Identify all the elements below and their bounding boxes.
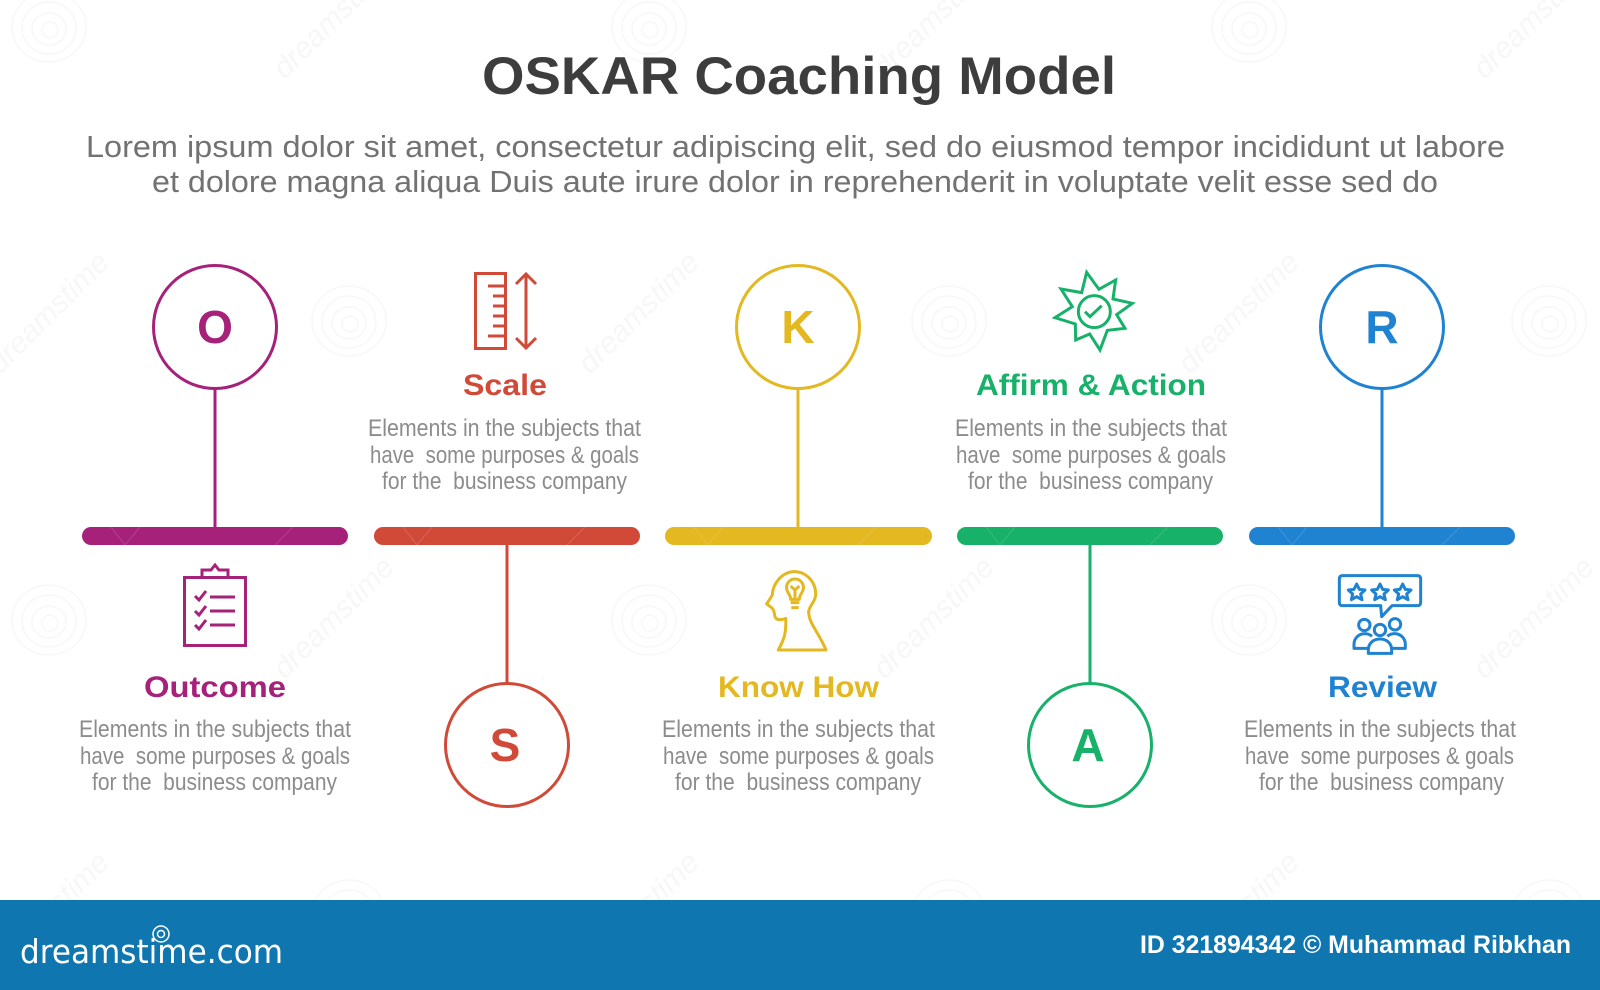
panel: Know How xyxy=(662,266,935,796)
description: Scale xyxy=(368,415,641,495)
heading: Scale: Scale xyxy=(463,369,547,402)
description: Review xyxy=(1244,716,1516,796)
letter circle: K: K xyxy=(781,301,815,353)
watermark: dreamstime xyxy=(1467,551,1600,685)
description: Review: have some purposes & goals xyxy=(1245,743,1514,770)
watermark: dreamstime xyxy=(867,551,1001,685)
watermark: dreamstime xyxy=(267,551,401,685)
description: Know How: Elements in the subjects that xyxy=(662,716,935,743)
description: Scale: Elements in the subjects that xyxy=(368,415,641,442)
description: Affirm & Action xyxy=(955,415,1227,495)
description: Scale: for the business company xyxy=(382,468,627,495)
icon: ruler with arrow xyxy=(476,274,536,348)
footer bar xyxy=(0,900,1600,990)
description: Know How: have some purposes & goals xyxy=(663,743,934,770)
description: Review: for the business company xyxy=(1259,769,1504,796)
letter circle: R xyxy=(1320,266,1444,388)
timeline bar: Review xyxy=(1249,527,1515,545)
footer credit: ID 321894342 © Muhammad Ribkhan xyxy=(1140,931,1571,959)
heading: Review: Review xyxy=(1328,671,1438,704)
description: Affirm & Action: have some purposes & goals xyxy=(956,442,1226,469)
heading: Outcome: Outcome xyxy=(144,671,286,704)
bar watermark marks xyxy=(111,527,1460,545)
description: Affirm & Action: for the business company xyxy=(968,468,1213,495)
subtitle xyxy=(86,129,1505,199)
connector: K xyxy=(796,389,800,527)
letter circle: S: S xyxy=(490,719,520,771)
description: Know How xyxy=(662,716,935,796)
title: OSKAR Coaching Model xyxy=(482,47,1116,106)
panel: Scale xyxy=(368,274,641,806)
icon: rating bubble and people xyxy=(1339,576,1421,653)
panel: Review xyxy=(1244,266,1516,796)
panel: Outcome xyxy=(79,266,351,796)
footer logo: dreamstime.com xyxy=(20,932,283,971)
connector: A xyxy=(1088,545,1092,683)
watermark: dreamstime xyxy=(1172,846,1306,980)
description: Know How: for the business company xyxy=(675,769,921,796)
letter circle: O: O xyxy=(197,301,233,353)
letter circle: A xyxy=(1028,684,1152,806)
description: Scale: have some purposes & goals xyxy=(370,442,639,469)
description: Outcome: Elements in the subjects that xyxy=(79,716,351,743)
icon: badge with check xyxy=(1055,272,1132,350)
timeline bar: Know How xyxy=(665,527,932,545)
letter circle: K xyxy=(736,266,860,388)
subtitle: Lorem ipsum dolor sit amet, consectetur adipiscing elit, sed do eiusmod tempor incididunt ut labore xyxy=(86,129,1505,164)
watermark: dreamstime xyxy=(572,846,706,980)
letter circle: R: R xyxy=(1365,301,1399,353)
letter circle: S xyxy=(446,684,568,806)
panel: Affirm & Action xyxy=(955,272,1227,806)
connector: O xyxy=(214,389,216,527)
description: Outcome: have some purposes & goals xyxy=(80,743,350,770)
description: Affirm & Action: Elements in the subjects that xyxy=(955,415,1227,442)
watermark: dreamstime xyxy=(572,246,706,380)
icon: clipboard checklist xyxy=(184,565,246,646)
heading: Know How: Know How xyxy=(718,671,880,704)
icon: head with light bulb xyxy=(767,572,826,650)
description: Outcome: for the business company xyxy=(92,769,337,796)
connector: R xyxy=(1380,389,1384,527)
letter circle: O xyxy=(154,266,276,388)
description: Review: Elements in the subjects that xyxy=(1244,716,1516,743)
connector: S xyxy=(506,545,508,683)
timeline bar: Outcome xyxy=(82,527,348,545)
heading: Affirm & Action: Affirm & Action xyxy=(976,369,1206,402)
subtitle: et dolore magna aliqua Duis aute irure dolor in reprehenderit in voluptate velit esse sed do xyxy=(152,164,1438,199)
timeline bar: Scale xyxy=(374,527,640,545)
description: Outcome xyxy=(79,716,351,796)
timeline bar: Affirm & Action xyxy=(957,527,1223,545)
watermark: dreamstime xyxy=(1172,246,1306,380)
letter circle: A: A xyxy=(1071,719,1105,771)
